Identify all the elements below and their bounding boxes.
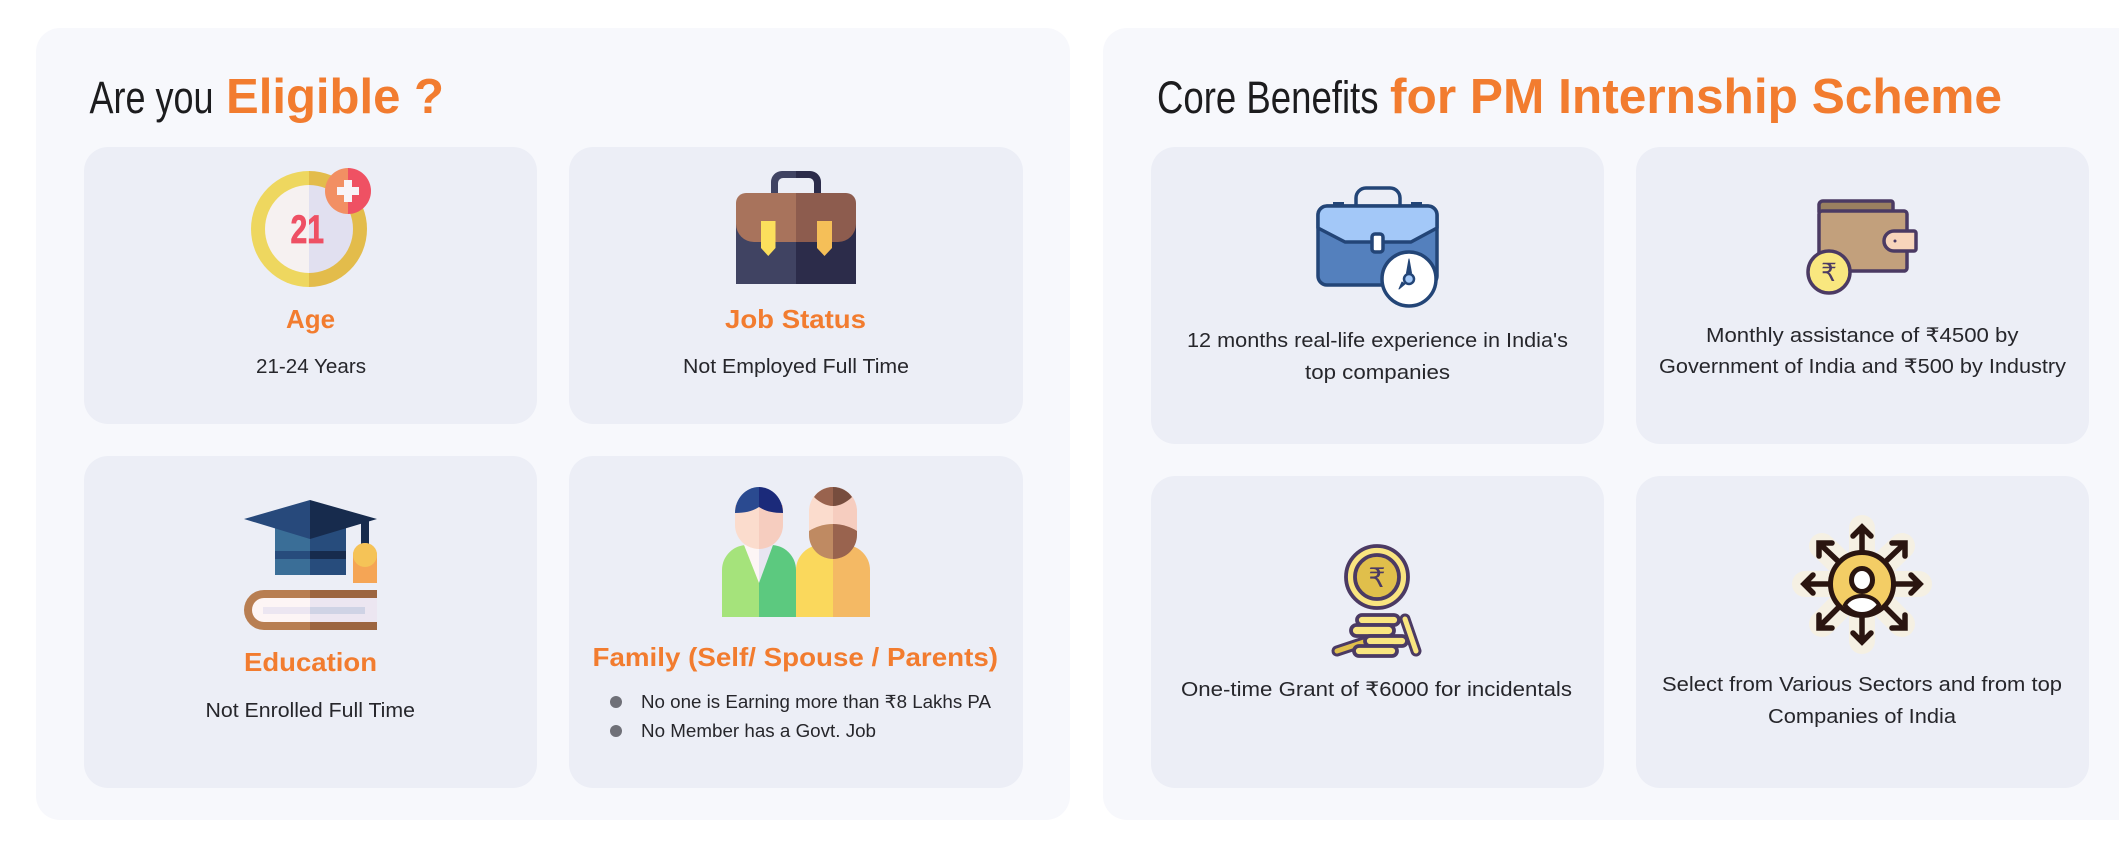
icon: rupee coin and stack: ₹ — [1368, 563, 1386, 593]
card: sectors — [1636, 476, 2089, 788]
criteria list: No one is Earning more than ₹8 Lakhs PA — [641, 692, 991, 712]
value: age range: 21-24 Years — [256, 356, 366, 378]
icon: brown briefcase — [736, 171, 856, 284]
text: monthly assistance: Monthly assistance of ₹4500 by — [1706, 325, 2018, 347]
text: experience — [1187, 330, 1568, 384]
label: age: Age — [286, 304, 335, 334]
icon: graduation cap and book — [244, 500, 377, 630]
icon: wallet and coin — [1808, 201, 1916, 293]
label: family: Family (Self/ Spouse / Parents) — [592, 642, 998, 672]
heading: are you eligible: Eligible ? — [226, 70, 444, 124]
value: education: Not Enrolled Full Time — [206, 700, 415, 722]
card: age — [84, 147, 537, 424]
icon: age 21 badge: 21 — [290, 208, 324, 252]
text: monthly assistance: Government of India and ₹500 by Industry — [1659, 356, 2066, 378]
text: experience: top companies — [1305, 362, 1450, 384]
icon: rupee coin and stack — [1337, 546, 1416, 656]
icon: two people — [722, 487, 870, 617]
icon: blue briefcase with clock — [1318, 188, 1437, 306]
card: experience — [1151, 147, 1604, 444]
text: grant: One-time Grant of ₹6000 for incidentals — [1181, 679, 1572, 701]
criteria list: No Member has a Govt. Job — [641, 721, 876, 741]
heading: are you eligible — [90, 70, 444, 124]
icon: wallet and coin: ₹ — [1821, 259, 1837, 287]
heading: core benefits: Core Benefits — [1157, 72, 1378, 123]
card: job status — [569, 147, 1023, 424]
text: sectors — [1662, 674, 2062, 728]
text: experience: 12 months real-life experience in India's — [1187, 330, 1568, 352]
card: family — [569, 456, 1023, 788]
criteria list — [610, 692, 991, 741]
label: job status: Job Status — [725, 304, 866, 334]
text: sectors: Companies of India — [1768, 706, 1957, 728]
icon: age 21 badge — [251, 168, 371, 287]
panel: core benefits — [1103, 28, 2119, 820]
text: monthly assistance — [1659, 325, 2066, 378]
panel: are you eligible — [36, 28, 1070, 820]
heading: are you eligible: Are you — [90, 72, 214, 123]
label: education: Education — [244, 647, 377, 677]
heading: core benefits: for PM Internship Scheme — [1390, 70, 2002, 124]
card: education — [84, 456, 537, 788]
card: monthly assistance — [1636, 147, 2089, 444]
text: sectors: Select from Various Sectors and from top — [1662, 674, 2062, 696]
card: one-time grant — [1151, 476, 1604, 788]
icon: person with radiating arrows — [1804, 527, 1920, 642]
value: job status: Not Employed Full Time — [683, 356, 909, 378]
